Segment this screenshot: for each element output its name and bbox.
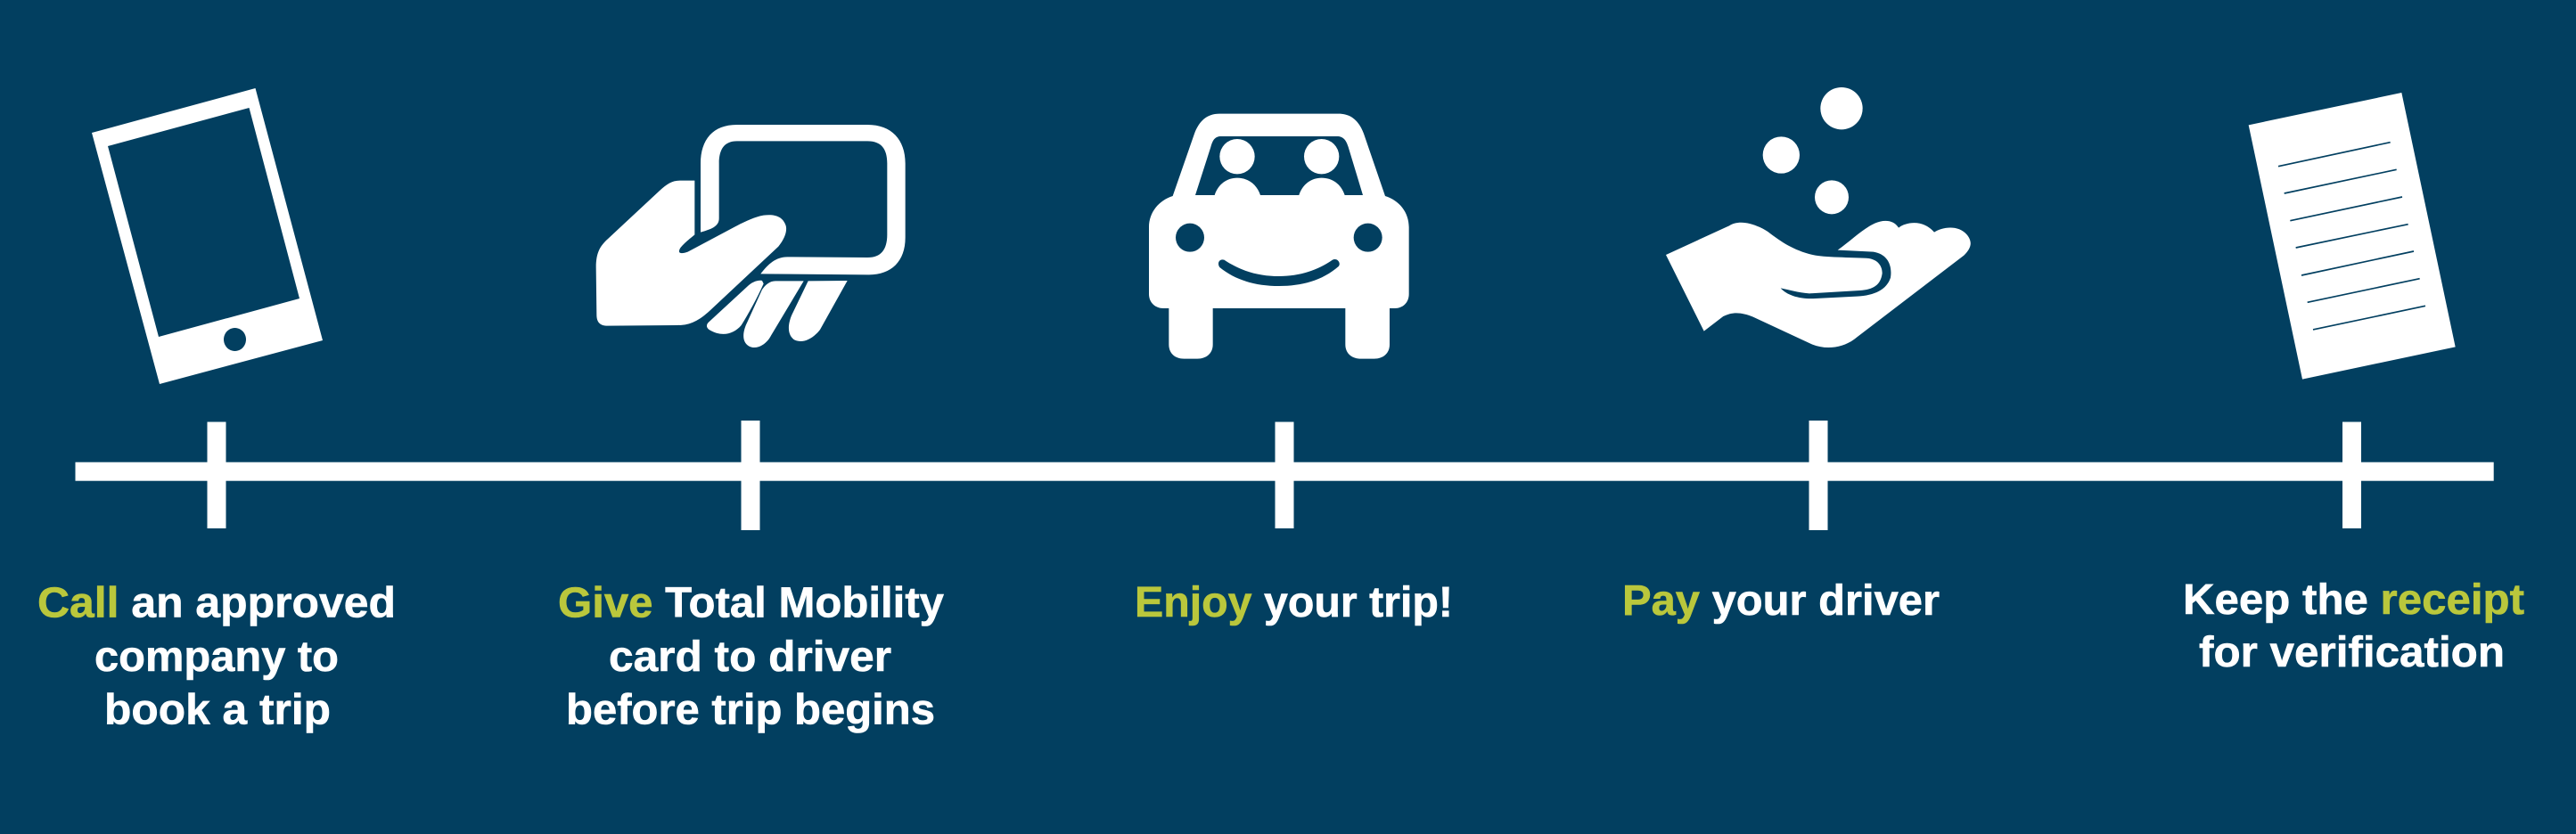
step 3 text: Enjoy your trip!	[1135, 579, 1453, 626]
icon: smiling car	[1149, 114, 1409, 359]
step 5 text	[2183, 576, 2524, 676]
car body	[1149, 114, 1409, 359]
passengers	[1215, 178, 1345, 195]
smile	[1218, 259, 1340, 286]
icon: coins falling into hand	[1666, 87, 1971, 348]
icon: hand holding card	[596, 125, 906, 348]
coins	[1820, 87, 1863, 129]
step 4 text: Pay your driver	[1622, 577, 1940, 625]
icon: receipt	[2249, 93, 2456, 380]
card outline	[701, 125, 906, 274]
step 1 text: Call an approved	[37, 580, 396, 627]
step 1 text: book a trip	[104, 687, 331, 734]
step 1 text	[37, 580, 396, 734]
icon: smartphone	[92, 88, 323, 384]
step 2 text: card to driver	[609, 634, 891, 681]
step 2 text: before trip begins	[566, 687, 935, 734]
step 5 text: for verification	[2199, 629, 2505, 676]
step 2 text	[558, 580, 944, 734]
palm and thumb	[596, 181, 786, 326]
headlights	[1176, 224, 1204, 252]
fingers	[707, 281, 848, 348]
timeline with step ticks	[75, 421, 2494, 530]
step 5 text: Keep the receipt	[2183, 576, 2524, 624]
step 2 text: Give Total Mobility	[558, 580, 944, 627]
open hand	[1666, 221, 1971, 348]
step 1 text: company to	[94, 634, 339, 681]
windshield	[1195, 136, 1363, 195]
